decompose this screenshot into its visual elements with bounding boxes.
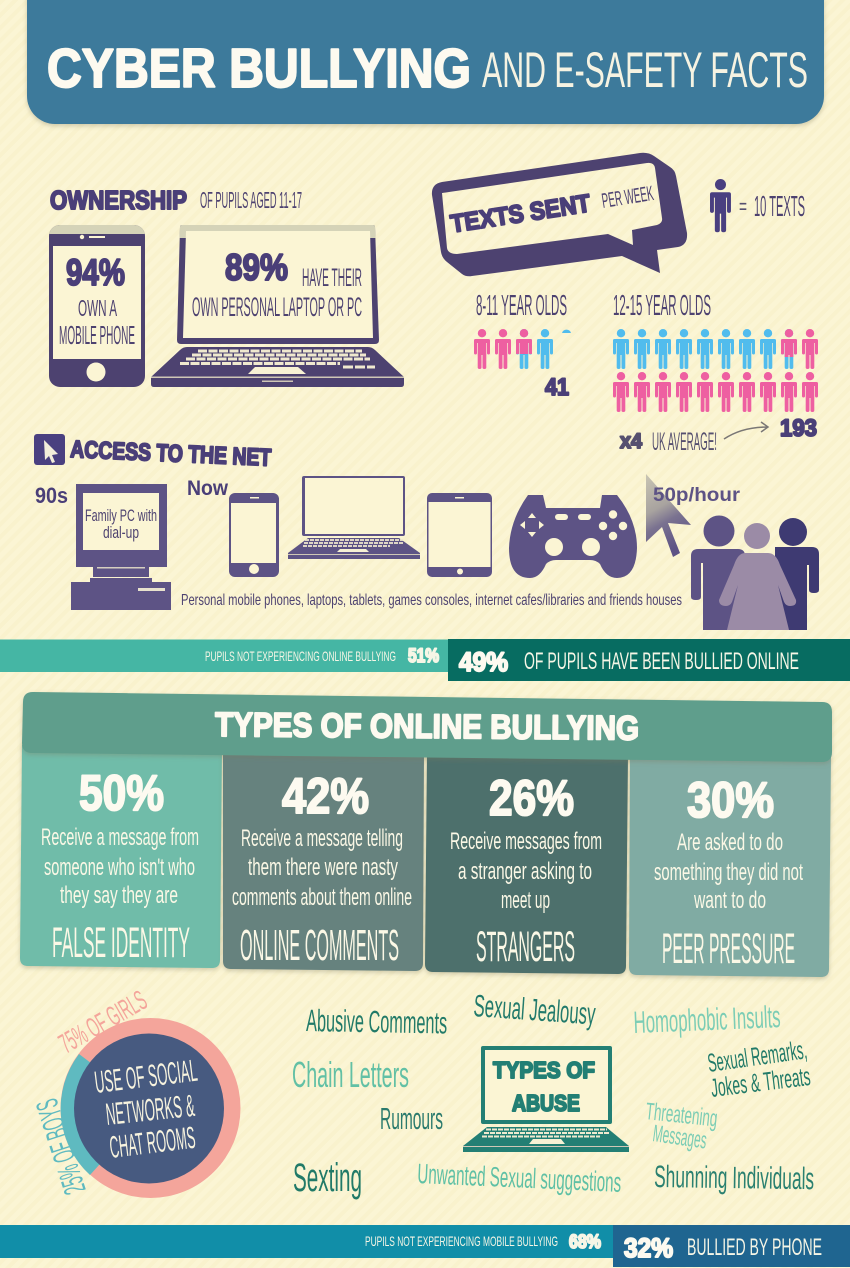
heading banner — [22, 692, 832, 762]
icon: family desktop PC — [71, 484, 171, 610]
value 41: 41 — [545, 374, 569, 401]
card: false identity: they say they are — [60, 882, 178, 909]
section: ownership: MOBILE PHONE — [59, 320, 135, 350]
icon: games controller — [509, 495, 637, 578]
speech bubble — [432, 153, 687, 276]
icon: arrow cursor — [646, 474, 691, 557]
heading banner: TYPES OF ONLINE BULLYING — [215, 706, 639, 748]
word: messages: Messages — [651, 1120, 708, 1154]
card: peer pressure — [629, 755, 831, 977]
word: rumours: Rumours — [380, 1101, 443, 1136]
stat bar: mobile bullying: 68% — [569, 1232, 601, 1253]
chart: social networks donut: USE OF SOCIAL — [93, 1053, 199, 1100]
panel: types of online bullying — [20, 692, 832, 977]
icon: group of friends — [691, 516, 819, 630]
icon: cursor badge — [34, 434, 65, 465]
legend: one figure equals 10 texts: = — [739, 194, 747, 219]
card: strangers: STRANGERS — [476, 923, 575, 971]
card: strangers: meet up — [501, 887, 550, 914]
card: online comments: Receive a message telling — [241, 825, 403, 852]
card: online comments: 42% — [282, 768, 369, 824]
section: texts sent: UK AVERAGE! — [652, 428, 717, 456]
icon: laptop 89%: 89% — [225, 247, 288, 288]
stat bar: mobile bullying: 32% — [624, 1233, 673, 1263]
icon: mobile phone 94%: OWN A — [78, 295, 117, 321]
pictogram: 8-11 year olds — [474, 329, 571, 369]
stat bar: mobile bullying: PUPILS NOT EXPERIENCING MOBILE BULLYING — [365, 1233, 558, 1249]
title: cyber bullying: CYBER BULLYING — [47, 37, 471, 99]
speech bubble: PER WEEK — [600, 182, 655, 213]
card: strangers — [425, 752, 628, 974]
title banner — [27, 0, 824, 124]
section: ownership — [49, 185, 404, 387]
card: false identity — [20, 745, 222, 968]
value 193: 193 — [780, 415, 817, 442]
section: ownership: OF PUPILS AGED 11-17 — [200, 187, 302, 213]
icon: laptop types of abuse — [463, 1046, 629, 1152]
section: access to the net — [34, 434, 819, 630]
card: false identity: 50% — [79, 765, 164, 821]
legend: one figure equals 10 texts — [710, 179, 805, 232]
card: online comments — [223, 750, 424, 971]
icon: laptop types of abuse: ABUSE — [512, 1090, 580, 1116]
panel: types of online bullying: ONLINE COMMENTS — [240, 921, 399, 970]
chart: social networks donut: CHAT ROOMS — [108, 1120, 197, 1165]
stat bar: mobile bullying — [0, 1225, 850, 1267]
icon: laptop — [288, 476, 420, 559]
icon: laptop 89%: HAVE THEIR — [302, 264, 362, 292]
stat bar: online bullying: 49% — [459, 647, 508, 677]
label now: Now — [187, 477, 229, 500]
access heading: ACCESS TO THE NET — [70, 436, 272, 472]
card: strangers: Receive messages from — [450, 828, 602, 855]
icon: family desktop PC: dial-up — [103, 523, 139, 542]
word: sexual jealousy: Sexual Jealousy — [473, 988, 597, 1032]
card: strangers: a stranger asking to — [458, 858, 592, 885]
icon: mobile phone 94%: 94% — [66, 252, 125, 293]
section: texts sent — [432, 153, 818, 456]
word: sexting: Sexting — [293, 1156, 362, 1200]
icon: phone — [229, 493, 279, 577]
label 50p per hour: 50p/hour — [653, 485, 741, 506]
card: false identity: someone who isn't who — [44, 854, 195, 881]
pictogram: 12-15 year olds — [613, 329, 818, 412]
card: false identity: Receive a message from — [41, 824, 199, 851]
word: unwanted sexual suggestions: Unwanted Sexual suggestions — [417, 1158, 622, 1198]
word: threatening: Threatening — [644, 1098, 719, 1132]
chart: social networks donut: NETWORKS & — [104, 1088, 196, 1132]
section: texts sent: 8-11 YEAR OLDS — [476, 290, 567, 322]
word: chain letters: Chain Letters — [292, 1054, 409, 1095]
x4 multiplier: x4 — [620, 430, 642, 453]
icon: laptop 89% — [151, 225, 404, 387]
card: peer pressure: Are asked to do — [677, 829, 783, 856]
arrow to 193 — [724, 422, 768, 439]
icon: laptop types of abuse: TYPES OF — [493, 1057, 595, 1083]
icon: mobile phone 94% — [49, 225, 145, 387]
label: 75% of girls: 75% OF GIRLS — [54, 984, 152, 1059]
chart: social networks donut — [29, 984, 241, 1199]
panel: types of abuse word cloud — [292, 988, 814, 1200]
word: abusive comments: Abusive Comments — [306, 1003, 447, 1040]
panel: types of online bullying: FALSE IDENTITY — [52, 919, 190, 967]
card: peer pressure: 30% — [687, 772, 774, 828]
card: strangers: 26% — [489, 770, 574, 826]
card: peer pressure: want to do — [693, 887, 766, 914]
speech bubble heading: TEXTS SENT — [449, 189, 592, 238]
icon: tablet — [427, 493, 492, 577]
label 90s: 90s — [35, 483, 68, 508]
ownership heading: OWNERSHIP — [50, 185, 187, 215]
card: online comments: comments about them online — [232, 884, 412, 911]
stat bar: online bullying — [0, 639, 850, 681]
stat bar: online bullying: PUPILS NOT EXPERIENCING ONLINE BULLYING — [205, 648, 396, 664]
text: OWN PERSONAL LAPTOP OR PC — [192, 292, 362, 322]
stat bar: online bullying: 51% — [408, 646, 439, 667]
card: online comments: them there were nasty — [248, 854, 398, 881]
icon: family desktop PC: Family PC with — [85, 506, 157, 525]
